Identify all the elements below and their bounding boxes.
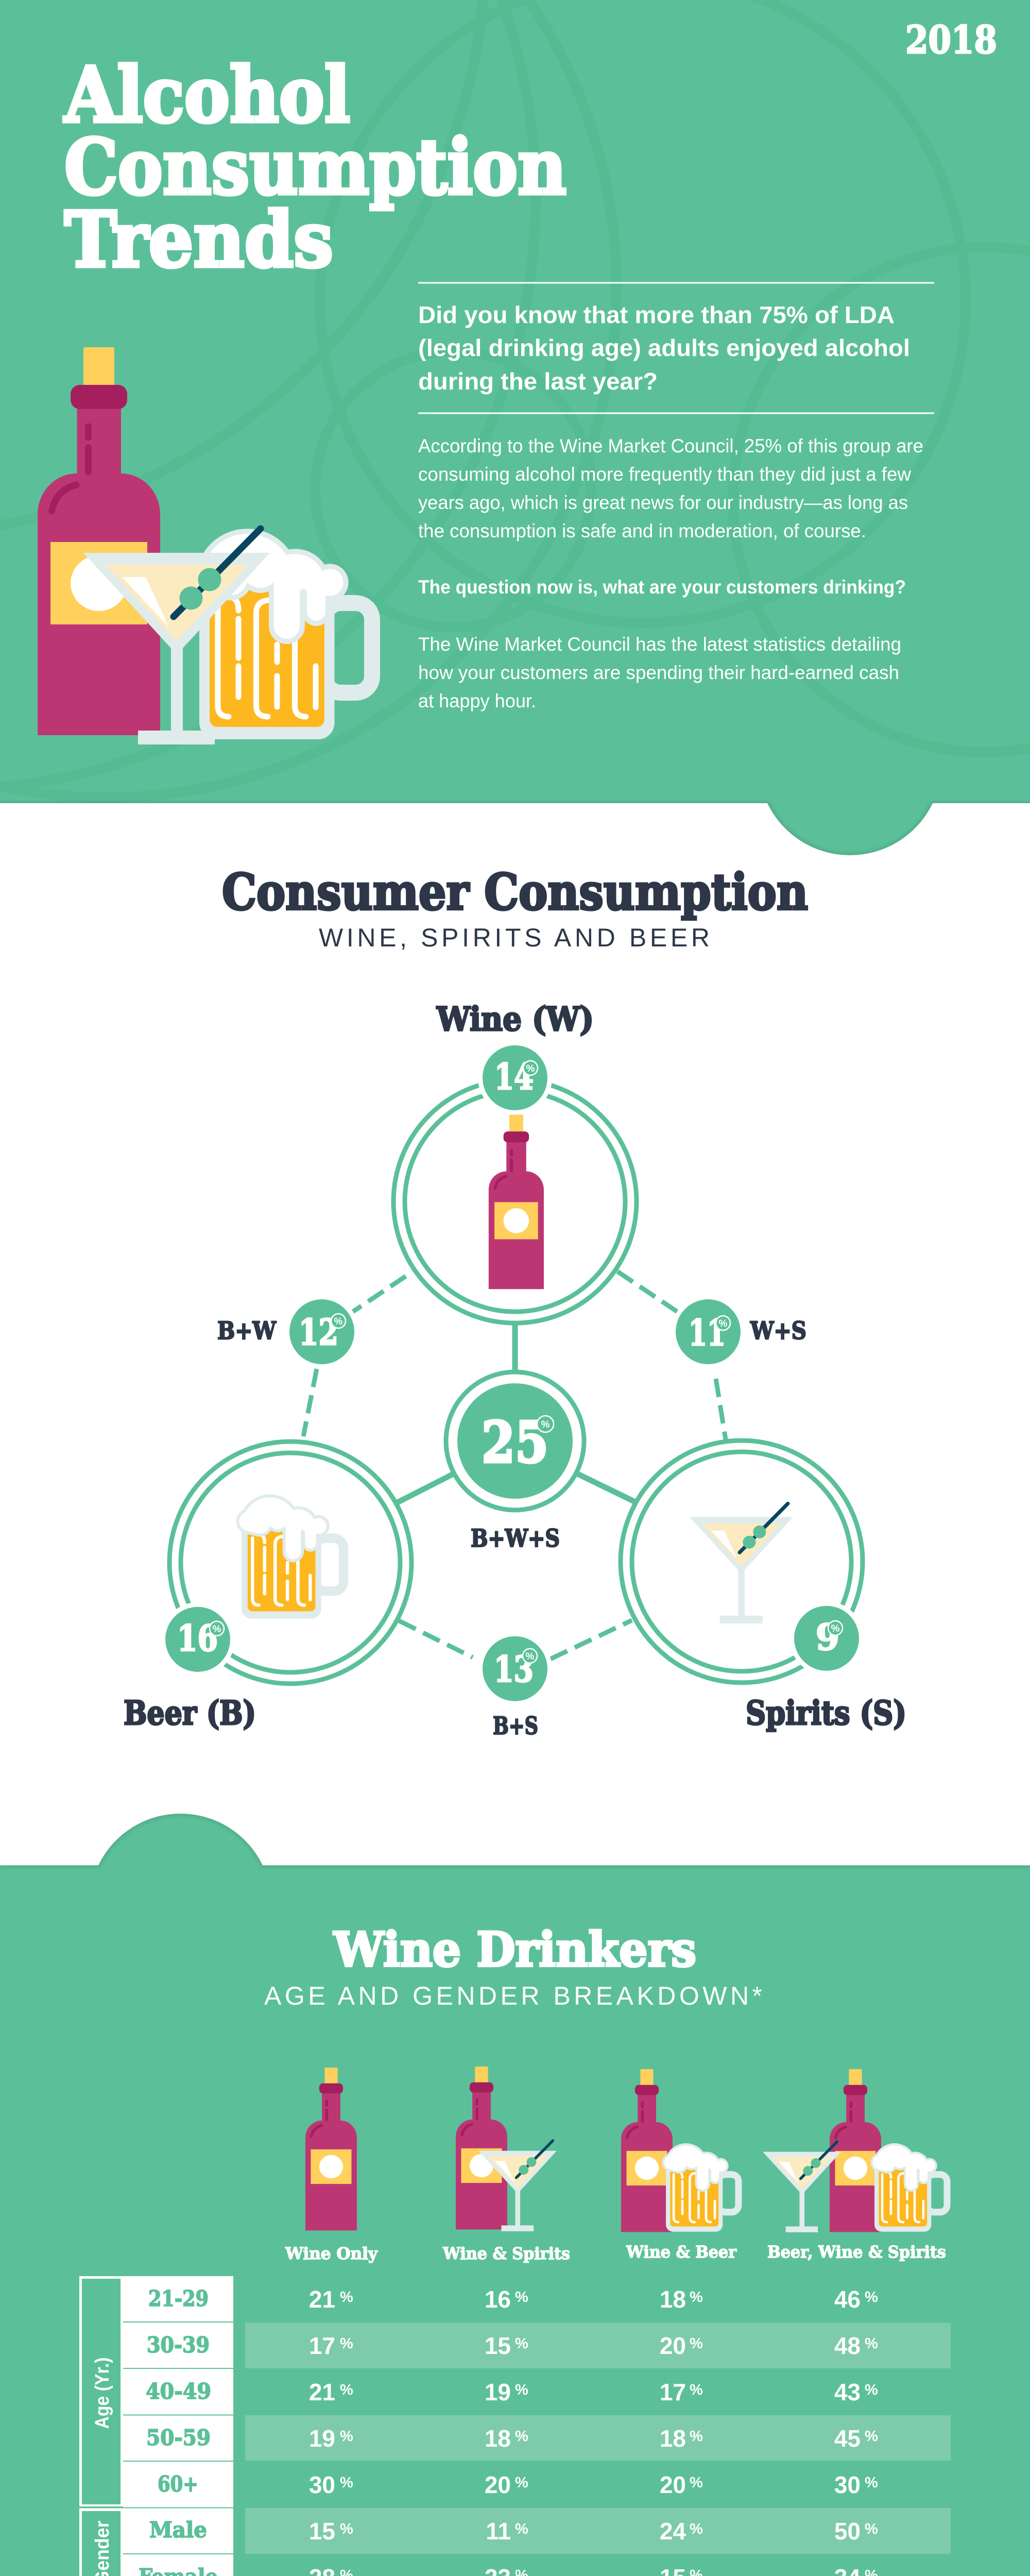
closing paragraph [418, 634, 901, 711]
heading: wine drinkers: Wine Drinkers [333, 1922, 696, 1977]
chart: venn consumption diagram [124, 1000, 906, 1740]
intro question [418, 282, 934, 414]
icon: wine bottle [489, 1114, 544, 1289]
table row headers: 30-39 [147, 2332, 210, 2358]
table row: 50-59: % [865, 2428, 878, 2445]
table row: 40-49: 17 [660, 2379, 686, 2405]
stat: 9 percent [789, 1601, 864, 1675]
stat: 12 percent: % [334, 1316, 343, 1327]
icon: beer wine and spirits [763, 2069, 947, 2232]
intro question: during the last year? [418, 368, 658, 395]
intro paragraph: consuming alcohol more frequently than they did just a few [418, 464, 911, 485]
table row: 30-39: 15 [485, 2332, 511, 2359]
title [63, 50, 566, 284]
table row: 30-39: 48 [834, 2332, 861, 2359]
icon: beer mug [239, 1497, 344, 1619]
stat: 13 percent: 13 [494, 1649, 534, 1690]
label: spirits: Spirits (S) [746, 1694, 906, 1733]
table row: 50-59: 18 [485, 2425, 511, 2452]
stat: 12 percent: 12 [299, 1312, 338, 1353]
table row: 30-39: % [690, 2335, 703, 2352]
stat: 25 percent center [446, 1372, 584, 1510]
table row: 30-39: % [340, 2335, 353, 2352]
table row: 21-29: % [515, 2289, 528, 2306]
stat: 13 percent: % [526, 1651, 535, 1662]
panel: wine drinkers [0, 1814, 1030, 2576]
label: wine: Wine (W) [436, 1000, 594, 1039]
table row: 21-29: 46 [834, 2286, 861, 2313]
table row: 30-39: 20 [660, 2332, 686, 2359]
intro paragraph [418, 435, 923, 541]
table row: 60+: 20 [660, 2471, 686, 2498]
table row headers: Male [149, 2517, 207, 2543]
table row: male: 50 [834, 2518, 861, 2545]
table row: 30-39: 17 [309, 2332, 335, 2359]
title: Trends [64, 195, 333, 284]
stat: 13 percent [478, 1632, 552, 1706]
heading: consumer consumption [222, 863, 808, 952]
column labels: Wine & Spirits [442, 2244, 570, 2263]
age axis label [82, 2279, 121, 2504]
table row: 40-49: 43 [834, 2379, 861, 2405]
stat: 12 percent [285, 1295, 359, 1369]
table row: 50-59: 45 [834, 2425, 861, 2452]
table row: male: % [340, 2521, 353, 2537]
heading: wine drinkers: AGE AND GENDER BREAKDOWN* [264, 1981, 762, 2010]
icon: wine and spirits [456, 2066, 557, 2231]
table bands [245, 2323, 951, 2554]
table row: 21-29: 16 [485, 2286, 511, 2313]
label: beer: Beer (B) [124, 1694, 256, 1733]
table row: 21-29: % [865, 2289, 878, 2306]
closing paragraph: The Wine Market Council has the latest statistics detailing [418, 634, 901, 655]
table row: 21-29: 18 [660, 2286, 686, 2313]
intro paragraph: years ago, which is great news for our industry—as long as [418, 492, 908, 513]
label: B+W+S: B+W+S [471, 1524, 560, 1553]
table row: male: 24 [660, 2518, 686, 2545]
table row: male [309, 2518, 878, 2545]
beer ring [169, 1442, 411, 1684]
stat: 14 percent [478, 1041, 552, 1115]
table row: 30-39 [309, 2332, 878, 2359]
column labels: Beer, Wine & Spirits [767, 2242, 946, 2262]
intro paragraph: According to the Wine Market Council, 25% of this group are [418, 435, 923, 456]
table row: 50-59: 19 [309, 2425, 335, 2452]
stat: 9 percent: % [831, 1623, 840, 1634]
table row headers: 21-29 [148, 2286, 209, 2311]
intro question: Did you know that more than 75% of LDA [418, 301, 895, 328]
stat: 16 percent: 16 [177, 1618, 218, 1659]
table row: male: % [515, 2521, 528, 2537]
table row: 60+: % [865, 2475, 878, 2491]
intro question: (legal drinking age) adults enjoyed alcohol [418, 334, 910, 361]
table row: 50-59: % [690, 2428, 703, 2445]
intro paragraph: the consumption is safe and in moderation, of course. [418, 520, 866, 541]
stat: 14 percent: % [526, 1063, 535, 1074]
heading: consumer consumption: WINE, SPIRITS AND BEER [319, 923, 710, 952]
stat: 11 percent [671, 1295, 745, 1369]
table row: 40-49: % [865, 2382, 878, 2398]
table row: 30-39: % [865, 2335, 878, 2352]
title: Consumption [64, 122, 566, 212]
icon: hero drinks [38, 347, 372, 744]
table row: male: 15 [309, 2518, 335, 2545]
table row: 60+: 30 [309, 2471, 335, 2498]
label: B+W: B+W [217, 1317, 277, 1345]
table row: 21-29: 21 [309, 2286, 335, 2313]
year label: 2018 [905, 18, 997, 62]
table row: 60+: % [690, 2475, 703, 2491]
connector lines [303, 1272, 726, 1659]
table row: male: % [865, 2521, 878, 2537]
stat: 25 percent center: 25 [482, 1409, 548, 1476]
icon: wine only [305, 2067, 357, 2230]
panel: hero header [0, 0, 1030, 855]
gender axis label [82, 2511, 121, 2576]
table row headers: 50-59 [146, 2425, 211, 2450]
title: Alcohol [63, 50, 350, 140]
table row: 21-29 [309, 2286, 878, 2313]
stat: 14 percent: 14 [494, 1056, 534, 1098]
table row headers: 60+ [158, 2471, 198, 2497]
table row: 50-59: % [515, 2428, 528, 2445]
table row: male: % [690, 2521, 703, 2537]
table row: 40-49 [309, 2379, 878, 2405]
table row: 60+: 30 [834, 2471, 861, 2498]
stat: 16 percent [161, 1602, 235, 1676]
stat: 11 percent: % [719, 1318, 728, 1329]
table row: 50-59: % [340, 2428, 353, 2445]
column labels: Wine Only [285, 2244, 378, 2263]
table row: 40-49: 21 [309, 2379, 335, 2405]
heading: consumer consumption: Consumer Consumption [222, 863, 808, 921]
stat: 11 percent: 11 [689, 1312, 726, 1354]
label: B+S: B+S [493, 1712, 538, 1740]
label: W+S: W+S [750, 1317, 806, 1345]
icon: wine and beer [621, 2069, 739, 2232]
closing paragraph: at happy hour. [418, 690, 536, 711]
question callout: The question now is, what are your customers drinking? [418, 577, 906, 598]
closing paragraph: how your customers are spending their hard-earned cash [418, 662, 899, 683]
table row: 60+: % [515, 2475, 528, 2491]
table row: 21-29: % [690, 2289, 703, 2306]
table row: 40-49: % [690, 2382, 703, 2398]
table row: 40-49: % [515, 2382, 528, 2398]
table row: 50-59: 18 [660, 2425, 686, 2452]
table row: 30-39: % [515, 2335, 528, 2352]
table row headers: 40-49 [146, 2379, 211, 2404]
table row: 60+ [309, 2471, 878, 2498]
table row: 21-29: % [340, 2289, 353, 2306]
table row: 50-59 [309, 2425, 878, 2452]
wine ring [393, 1080, 637, 1323]
icon: martini [690, 1503, 793, 1623]
stat: 9 percent: 9 [816, 1617, 839, 1658]
table row: female [309, 2564, 878, 2576]
table row: male: 11 [486, 2518, 511, 2545]
stat: 16 percent: % [213, 1624, 221, 1635]
table row: 60+: % [340, 2475, 353, 2491]
table row: 40-49: 19 [485, 2379, 511, 2405]
table row: 40-49: % [340, 2382, 353, 2398]
table row headers [79, 2276, 233, 2576]
stat: 25 percent center: % [541, 1419, 550, 1430]
spirits ring [621, 1440, 863, 1683]
table row: 60+: 20 [485, 2471, 511, 2498]
column labels [285, 2242, 946, 2263]
column labels: Wine & Beer [626, 2242, 737, 2262]
age axis label: Age (Yr.) [92, 2358, 113, 2429]
heading: wine drinkers [264, 1922, 762, 2010]
